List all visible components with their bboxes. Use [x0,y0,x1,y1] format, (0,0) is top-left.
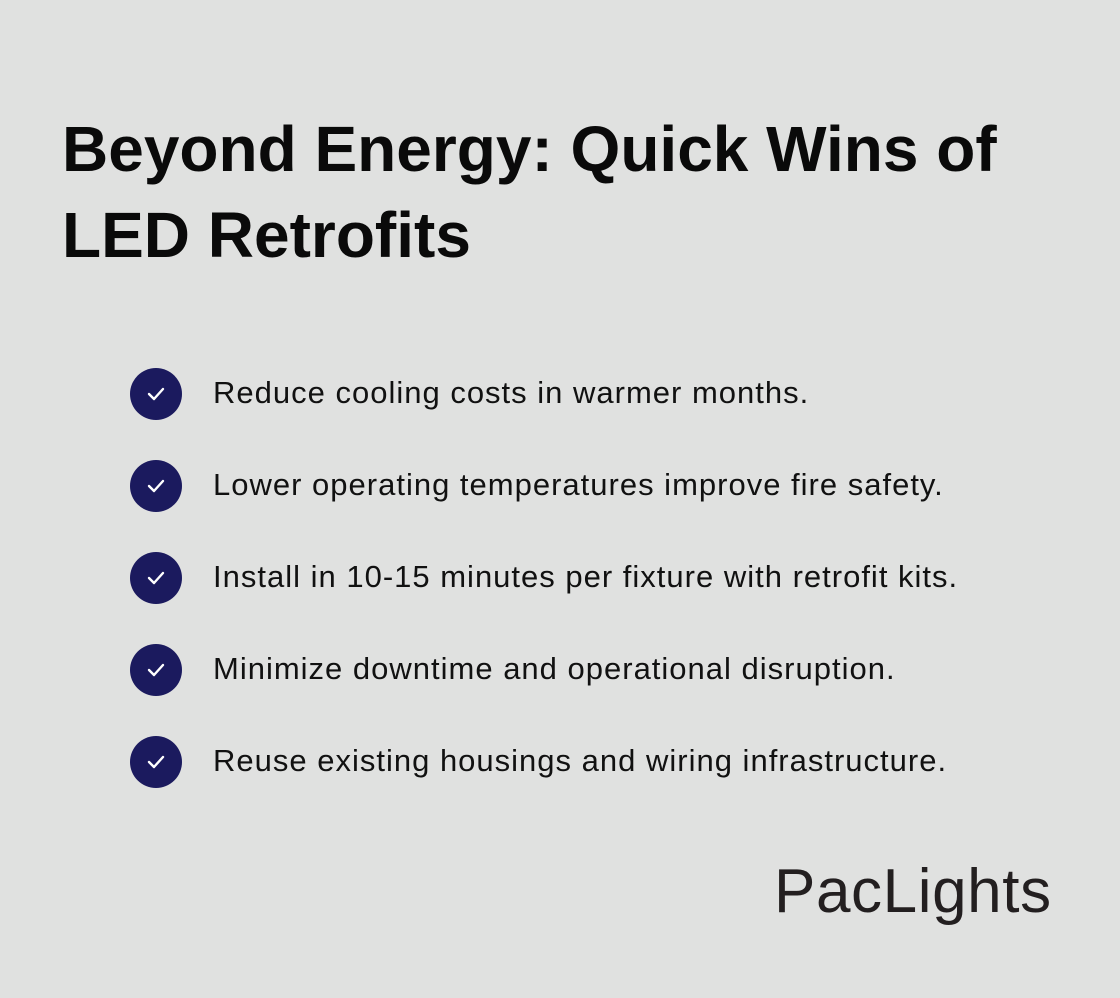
list item 4 [130,644,896,696]
list item 4: Minimize downtime and operational disruption. [213,651,896,686]
list item 3 [130,552,958,604]
list item 2 [130,460,944,512]
list item 3: Install in 10-15 minutes per fixture with retrofit kits. [213,559,958,594]
title: LED Retrofits [62,199,471,271]
title [62,113,997,271]
list item 1 [130,368,809,420]
logo: PacLights [774,857,1052,926]
list item 1: Reduce cooling costs in warmer months. [213,375,809,410]
list item 5: Reuse existing housings and wiring infrastructure. [213,743,947,778]
list item 2: Lower operating temperatures improve fire safety. [213,467,944,502]
title: Beyond Energy: Quick Wins of [62,113,997,185]
list item 5 [130,736,947,788]
